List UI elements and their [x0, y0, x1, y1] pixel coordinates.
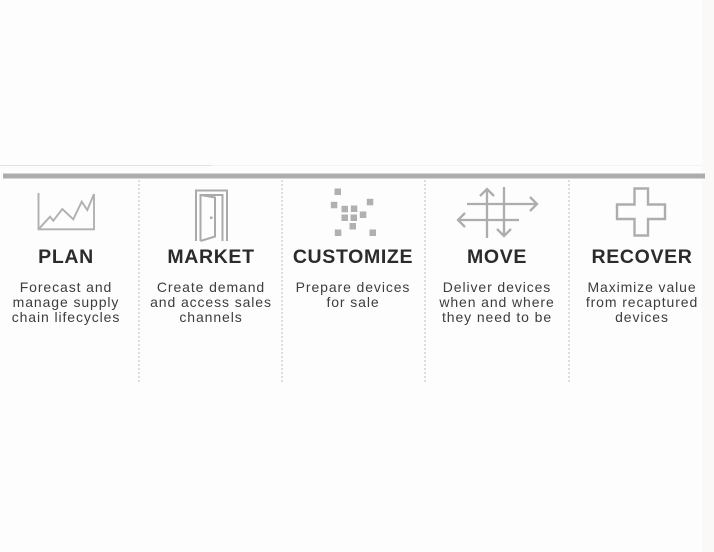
text: recover: from recaptured: [586, 294, 698, 310]
heading: customize: CUSTOMIZE: [293, 246, 413, 268]
heading: recover: RECOVER: [592, 246, 692, 268]
text: plan: [12, 279, 120, 325]
heading: market: MARKET: [167, 246, 255, 268]
text: plan: manage supply: [13, 294, 119, 310]
top rule: [3, 174, 705, 178]
text: market: [150, 279, 272, 325]
text: plan: chain lifecycles: [12, 309, 120, 325]
column: market: [150, 246, 272, 325]
icon: medical cross: [617, 188, 665, 236]
text: market: Create demand: [157, 279, 265, 295]
text: customize: Prepare devices: [296, 279, 410, 295]
text: customize: for sale: [326, 294, 380, 310]
text: recover: devices: [615, 309, 669, 325]
heading: move: MOVE: [467, 246, 527, 268]
text: customize: [296, 279, 410, 310]
text: market: and access sales: [150, 294, 272, 310]
icon: line chart: [38, 193, 94, 229]
heading: plan: PLAN: [38, 246, 94, 268]
icon: crossing arrows: [458, 187, 537, 238]
text: move: Deliver devices: [443, 279, 551, 295]
text: market: channels: [179, 309, 243, 325]
text: move: they need to be: [442, 309, 552, 325]
text: move: [439, 279, 555, 325]
icon: scattered squares: [331, 188, 376, 236]
text: recover: Maximize value: [587, 279, 697, 295]
column: customize: [293, 246, 413, 310]
column: recover: [586, 246, 698, 325]
text: plan: Forecast and: [20, 279, 112, 295]
text: move: when and where: [439, 294, 555, 310]
column: move: [439, 246, 555, 325]
text: recover: [586, 279, 698, 325]
column: plan: [12, 246, 120, 325]
icon: open door: [196, 190, 227, 241]
